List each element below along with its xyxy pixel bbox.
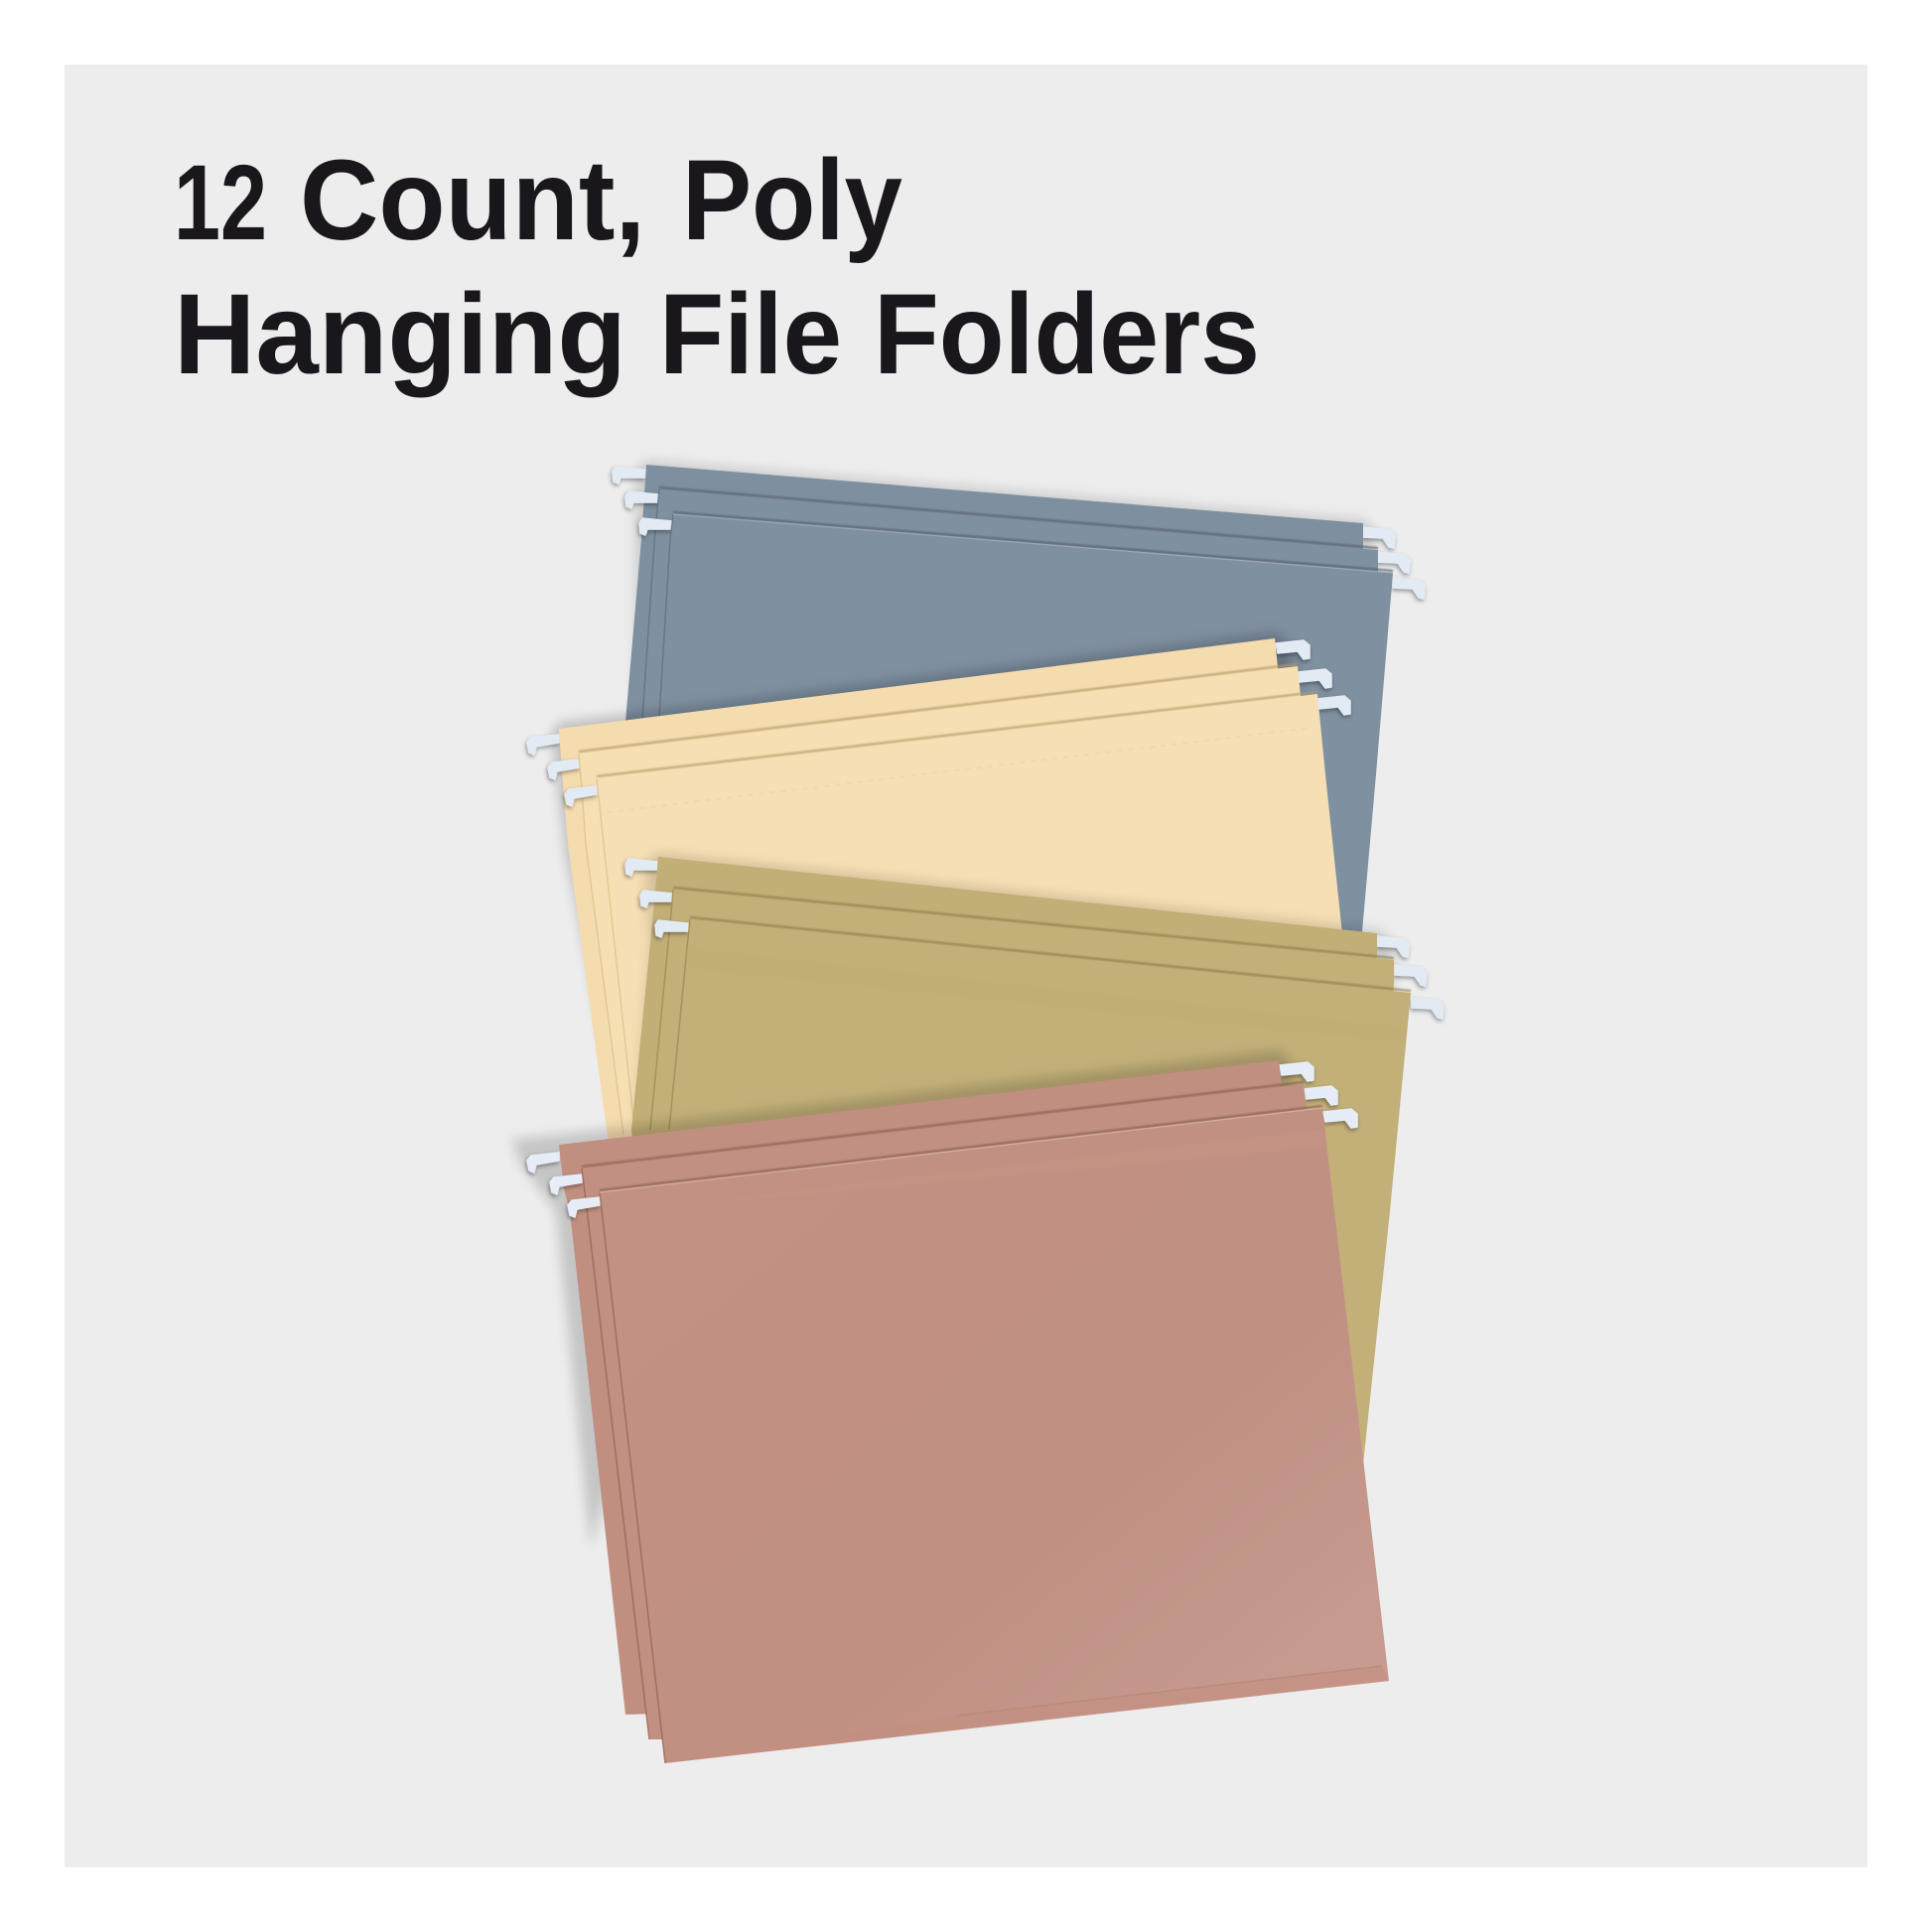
photo: fanned stacks of hanging folders — [511, 461, 1444, 1763]
title: Folders — [874, 271, 1260, 398]
title: Hanging — [174, 271, 626, 398]
blue folder 2 — [640, 489, 1378, 943]
title: Count, — [300, 137, 645, 264]
pink folder 3 — [600, 1108, 1389, 1763]
olive folder 2 — [650, 890, 1394, 1459]
stack: olive folders — [625, 853, 1444, 1464]
stack: yellow folders — [527, 632, 1350, 1162]
olive folder 1 — [631, 857, 1377, 1459]
olive folder 3 — [665, 919, 1411, 1464]
stack: blue folders — [613, 461, 1425, 943]
yellow folder 3 — [597, 694, 1343, 1162]
blue folder 3 — [655, 514, 1393, 943]
stack: pink folders — [511, 1050, 1389, 1763]
blue folder 1 — [623, 465, 1363, 943]
title: File — [659, 271, 842, 398]
pink folder 1 — [559, 1060, 1282, 1715]
title — [174, 137, 1260, 398]
pink folder 2 — [582, 1084, 1307, 1739]
yellow folder 1 — [559, 638, 1311, 1162]
title: 12 — [174, 142, 267, 262]
yellow folder 2 — [579, 666, 1325, 1162]
title: Poly — [682, 137, 902, 264]
